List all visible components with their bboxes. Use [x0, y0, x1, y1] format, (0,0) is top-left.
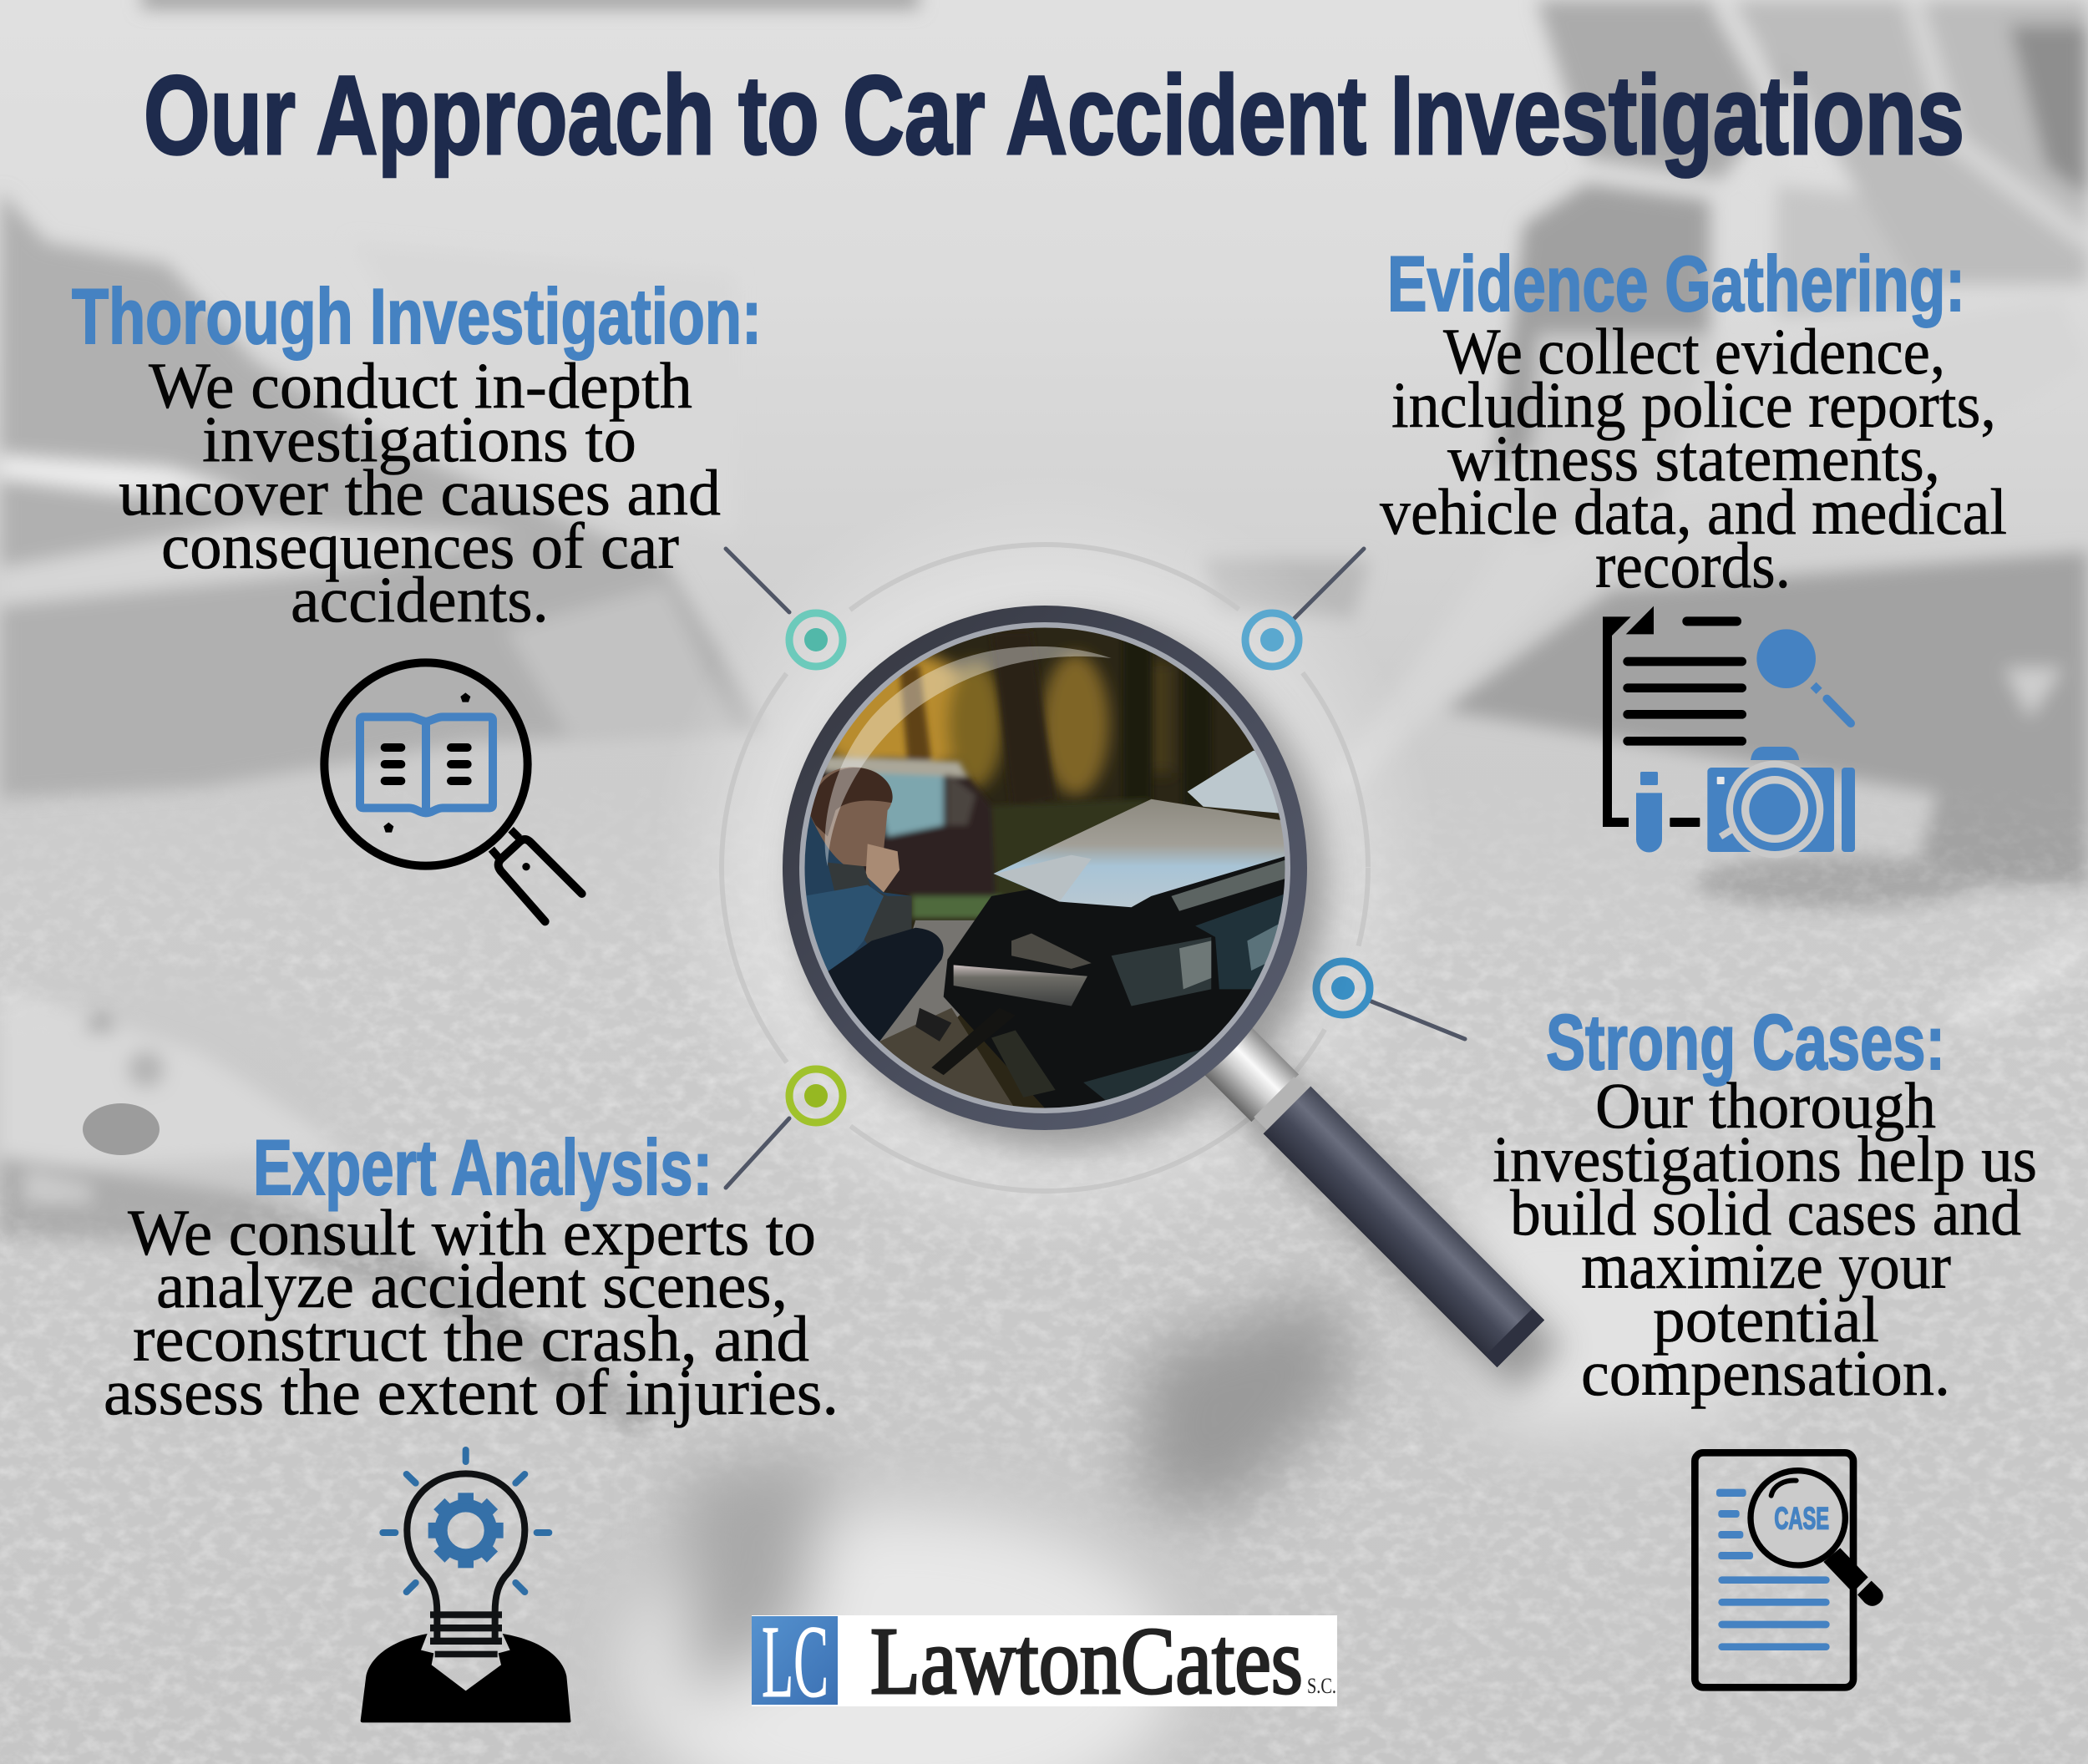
icon: case document with magnifier — [1695, 1452, 1883, 1687]
text block: strong cases: maximize your — [1581, 1229, 1951, 1302]
panel: evidence gathering — [1380, 240, 2007, 858]
decorative ring around lens — [722, 545, 1368, 1191]
magnifier shadow — [795, 618, 1563, 1393]
logo: LawtonCates: LC — [762, 1604, 829, 1719]
logo: LawtonCates: LawtonCates — [870, 1608, 1303, 1714]
text block: expert analysis: We consult with experts to — [128, 1196, 816, 1269]
text block: expert analysis: analyze accident scenes, — [156, 1249, 788, 1321]
lens rim — [791, 614, 1299, 1122]
text block: strong cases: potential — [1653, 1283, 1879, 1356]
leader line: dark blue — [1371, 1001, 1465, 1039]
text block: expert analysis: reconstruct the crash, and — [133, 1302, 809, 1375]
node: teal — [789, 613, 843, 667]
text block: strong cases: investigations help us — [1493, 1123, 2037, 1195]
icon: document, magnifier, test tube and camera — [1603, 606, 1855, 858]
panel: strong cases — [1493, 998, 2037, 1687]
text block: thorough investigation: accidents. — [291, 563, 549, 636]
text block: strong cases: build solid cases and — [1510, 1176, 2021, 1249]
text block: thorough investigation: investigations to — [202, 403, 636, 475]
node: dark blue — [1316, 961, 1370, 1015]
text block: evidence gathering: including police reports, — [1391, 368, 1996, 441]
lens photo: man beside crashed car — [805, 628, 1285, 1108]
logo: LawtonCates — [752, 1604, 1337, 1719]
leader line: teal — [726, 549, 789, 612]
icon: book under magnifier — [324, 662, 582, 921]
text block: evidence gathering — [1380, 315, 2007, 601]
text block: expert analysis: assess the extent of injuries. — [104, 1356, 839, 1428]
panel: thorough investigation — [72, 272, 762, 921]
leader line: light blue — [1293, 549, 1364, 620]
panel: expert analysis — [104, 1123, 839, 1722]
text block: evidence gathering: We collect evidence, — [1443, 315, 1945, 388]
node: light blue — [1245, 613, 1299, 667]
magnifier handle — [1199, 1021, 1544, 1367]
text block: evidence gathering: witness statements, — [1447, 422, 1940, 494]
icon: light bulb head with gear — [361, 1450, 570, 1722]
icon: case document with magnifier: CASE — [1774, 1501, 1829, 1536]
text block: strong cases: compensation. — [1581, 1336, 1950, 1409]
lens glare — [825, 646, 1112, 866]
text block: thorough investigation — [119, 349, 721, 636]
heading: strong cases: Strong Cases: — [1546, 998, 1945, 1086]
heading: thorough investigation: Thorough Investigation: — [72, 272, 762, 360]
text block: evidence gathering: vehicle data, and medical — [1380, 475, 2007, 548]
node: green — [789, 1069, 843, 1123]
logo: LawtonCates: S.C. — [1307, 1674, 1336, 1698]
text block: strong cases: Our thorough — [1595, 1069, 1936, 1142]
text block: evidence gathering: records. — [1595, 529, 1791, 601]
heading: expert analysis: Expert Analysis: — [253, 1123, 712, 1211]
text block: expert analysis — [104, 1196, 839, 1428]
text block: thorough investigation: uncover the causes and — [119, 456, 721, 529]
text block: thorough investigation: consequences of car — [161, 509, 679, 582]
magnifying glass — [776, 606, 1563, 1393]
text block: strong cases — [1493, 1069, 2037, 1409]
leader line: green — [726, 1118, 789, 1188]
text block: thorough investigation: We conduct in-depth — [149, 349, 692, 422]
